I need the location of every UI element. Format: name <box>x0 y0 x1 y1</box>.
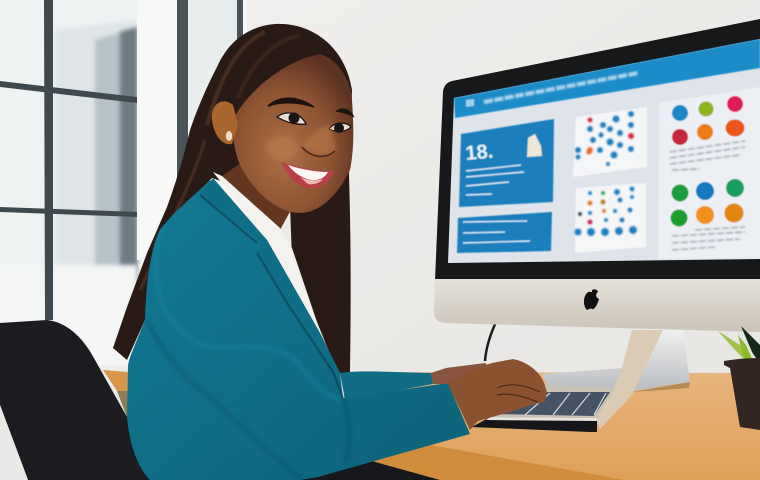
under desk shadow <box>290 460 440 480</box>
sleeve shading <box>147 228 349 477</box>
hair strands <box>140 32 300 290</box>
earring <box>226 131 232 141</box>
blazer body <box>127 180 470 480</box>
blue panel lower <box>457 212 552 253</box>
blue panel <box>459 119 554 207</box>
keyboard laptop <box>472 385 615 432</box>
blue panel: 18. <box>465 141 494 165</box>
floor wedge <box>0 405 28 480</box>
screen <box>448 39 760 263</box>
cheek highlight <box>266 136 298 160</box>
pot <box>724 358 760 430</box>
eyebrow right <box>337 109 353 116</box>
finger lines <box>497 385 540 402</box>
face <box>212 54 353 213</box>
monitor <box>434 19 760 332</box>
cable <box>485 322 496 361</box>
lapel shadow lines <box>200 195 343 398</box>
shirt <box>213 172 322 337</box>
monitor stand <box>542 330 690 429</box>
eyebrow left <box>268 98 314 107</box>
face shape <box>233 54 353 213</box>
screen header <box>454 39 760 118</box>
eye left <box>277 113 306 124</box>
logo <box>584 289 599 310</box>
icons group two <box>670 179 745 250</box>
desk <box>103 370 760 480</box>
icons group one <box>670 96 745 170</box>
window <box>0 0 247 365</box>
far sleeve <box>340 371 433 400</box>
monitor bezel <box>435 19 760 280</box>
screen content <box>454 39 760 259</box>
dot chart two <box>574 183 646 253</box>
monitor chin <box>434 279 760 332</box>
tongue <box>300 177 323 184</box>
chair <box>0 320 150 480</box>
mouth <box>281 162 334 188</box>
eye right <box>329 123 351 131</box>
nose <box>303 125 336 155</box>
ear <box>212 101 238 144</box>
person <box>113 24 547 480</box>
far forearm <box>431 363 490 384</box>
lapel <box>200 178 340 373</box>
hair back <box>113 24 352 374</box>
plant <box>718 326 760 430</box>
hand <box>448 359 547 430</box>
dot chart one <box>573 107 647 177</box>
teeth <box>288 165 328 180</box>
neck <box>222 160 292 230</box>
icon panel <box>658 87 760 259</box>
